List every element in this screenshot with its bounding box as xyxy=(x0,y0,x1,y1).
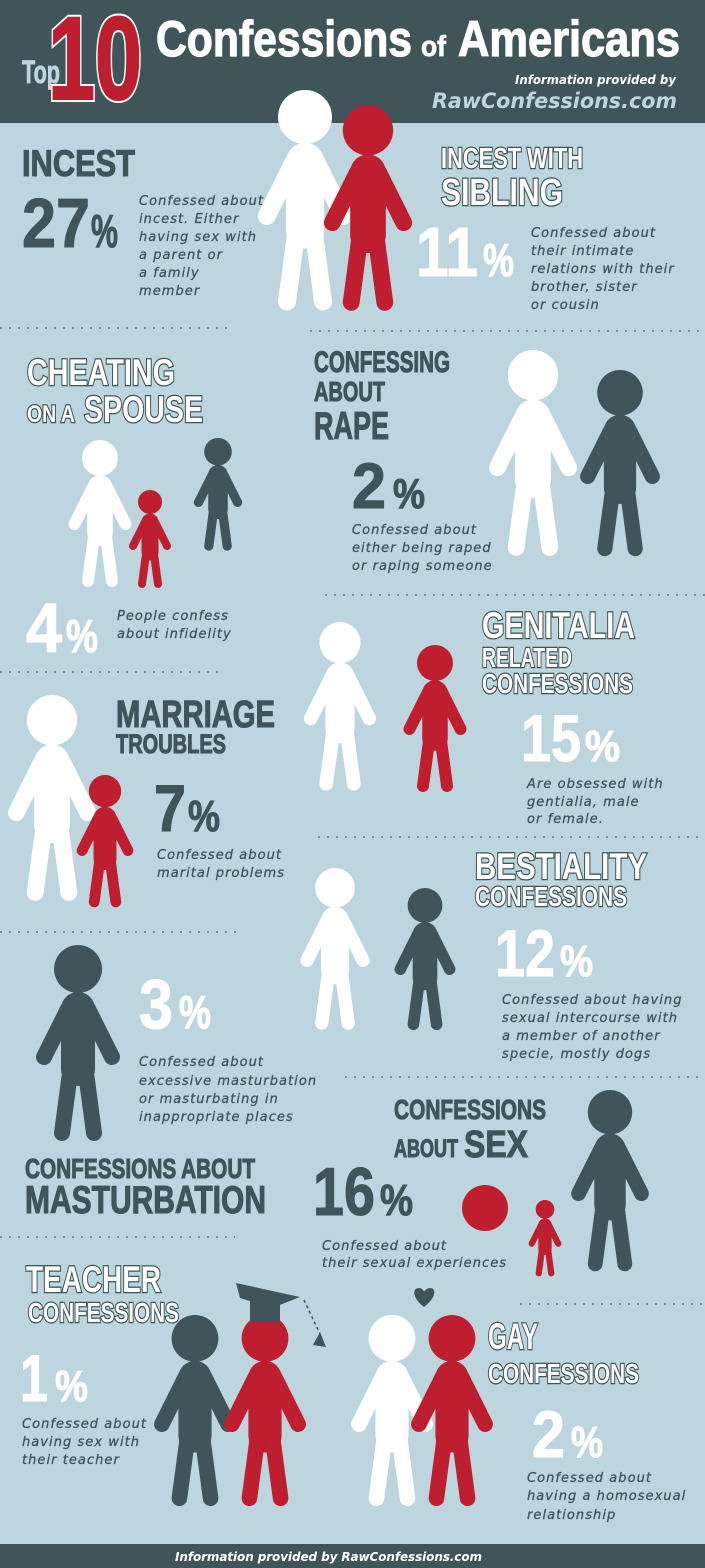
text: bestiality description: a member of another xyxy=(502,1029,661,1044)
stat: 2 percent: % xyxy=(571,1418,603,1467)
text: gay description: Confessed about xyxy=(527,1471,652,1486)
text: incest description xyxy=(139,194,264,299)
icon: neutral figures, gay xyxy=(359,1315,485,1498)
panel: bestiality xyxy=(307,846,683,1062)
title: Top xyxy=(22,54,60,90)
header banner xyxy=(0,0,705,125)
heading: genitalia: RELATED xyxy=(482,642,572,673)
heading: bestiality xyxy=(475,846,647,912)
text: incest description: member xyxy=(139,284,201,299)
text: bestiality description: sexual intercourse with xyxy=(502,1011,678,1026)
text: incest description: a family xyxy=(139,266,200,281)
footer: Information provided by RawConfessions.com xyxy=(175,1550,482,1564)
text: sibling description: Confessed about xyxy=(531,226,656,241)
text: sibling description: relations with their xyxy=(531,262,675,277)
heading: marriage: MARRIAGE xyxy=(116,694,275,736)
text: masturbation description: excessive masturbation xyxy=(139,1074,317,1089)
heading: marriage: TROUBLES xyxy=(116,729,226,759)
text: incest description: a parent or xyxy=(139,248,224,263)
heading: gay xyxy=(488,1316,639,1389)
text: masturbation description: Confessed about xyxy=(139,1055,264,1070)
stat: 4 percent xyxy=(26,589,98,667)
icon: neutral figures, genitalia xyxy=(311,622,460,786)
stat: 3 percent xyxy=(139,965,211,1043)
panel: rape xyxy=(314,346,652,574)
source credit xyxy=(432,73,677,113)
heading: incest with sibling xyxy=(441,143,583,214)
stat: 2 percent xyxy=(532,1397,603,1471)
stat: 16 percent: 16 xyxy=(313,1154,375,1230)
stat: 3 percent: % xyxy=(179,986,211,1038)
heading: teacher: TEACHER xyxy=(26,1259,161,1300)
text: cheating description xyxy=(117,609,232,642)
stat: 27 percent: 27 xyxy=(22,184,90,262)
heading: masturbation: CONFESSIONS ABOUT xyxy=(25,1153,255,1184)
heading: bestiality: CONFESSIONS xyxy=(475,881,627,912)
heading: marriage xyxy=(116,694,275,759)
stat: 7 percent: % xyxy=(188,792,220,841)
heading: sex: ABOUT xyxy=(394,1135,458,1163)
heading: genitalia: GENITALIA xyxy=(482,605,635,646)
heading: gay: GAY xyxy=(488,1316,538,1357)
icon: neutral figures, cheating xyxy=(74,438,238,584)
panel: incest xyxy=(22,143,264,299)
panel: genitalia xyxy=(311,605,664,827)
text: genitalia description: gentialia, male xyxy=(527,795,640,810)
heading: sex xyxy=(394,1094,546,1166)
stat: 2 percent: % xyxy=(393,470,425,517)
heading: rape: CONFESSING xyxy=(314,346,450,379)
title: of xyxy=(421,31,446,63)
panel: gay xyxy=(359,1288,686,1523)
heading: gay: CONFESSIONS xyxy=(488,1358,639,1389)
heading: rape: RAPE xyxy=(314,405,389,448)
text: gay description: relationship xyxy=(527,1508,616,1523)
text: rape description: either being raped xyxy=(352,541,492,556)
text: rape description: Confessed about xyxy=(352,523,477,538)
footer xyxy=(0,1544,705,1568)
icon: heart xyxy=(414,1288,434,1307)
heading: cheating: CHEATING xyxy=(27,352,175,393)
heading: rape xyxy=(314,346,450,448)
stat: 1 percent: 1 xyxy=(20,1341,48,1415)
text: sibling description: their intimate xyxy=(531,244,634,259)
text: sex description xyxy=(322,1239,507,1271)
heading: bestiality: BESTIALITY xyxy=(475,846,647,887)
heading: cheating: ON A xyxy=(27,401,75,428)
heading: teacher xyxy=(26,1259,179,1328)
text: rape description: or raping someone xyxy=(352,559,493,574)
text: incest description: Confessed about xyxy=(139,194,264,209)
text: bestiality description: specie, mostly dogs xyxy=(502,1047,651,1062)
panel: sex xyxy=(313,1090,641,1273)
text: sibling description: or cousin xyxy=(531,298,600,313)
text: gay description: having a homosexual xyxy=(527,1489,686,1504)
title xyxy=(22,0,680,125)
stat: 2 percent xyxy=(352,450,425,522)
stat: 7 percent xyxy=(154,771,220,845)
heading: sex: CONFESSIONS xyxy=(394,1094,546,1125)
text: bestiality description: Confessed about having xyxy=(502,993,683,1008)
stat: 4 percent: 4 xyxy=(26,589,62,667)
stat: 1 percent: % xyxy=(55,1362,88,1411)
icon: neutral figures, top centre xyxy=(267,90,404,302)
text: teacher description: having sex with xyxy=(22,1435,140,1450)
stat: 2 percent: 2 xyxy=(352,450,386,522)
text: bestiality description xyxy=(502,993,683,1062)
text: cheating description: People confess xyxy=(117,609,229,624)
text: genitalia description xyxy=(526,777,664,827)
text: marriage description xyxy=(157,848,285,881)
stat: 4 percent: % xyxy=(66,610,98,662)
stat: 11 percent: 11 xyxy=(416,213,478,291)
text: genitalia description: Are obsessed with xyxy=(526,777,664,792)
text: rape description xyxy=(352,523,493,574)
panel: teacher xyxy=(20,1259,326,1498)
source credit: RawConfessions.com xyxy=(432,89,677,113)
heading: incest: INCEST xyxy=(22,143,135,184)
stat: 12 percent: % xyxy=(560,937,593,986)
stat: 2 percent: 2 xyxy=(532,1397,565,1471)
text: masturbation description: inappropriate places xyxy=(139,1110,294,1125)
panel: masturbation xyxy=(25,945,317,1222)
stat: 3 percent: 3 xyxy=(139,965,173,1043)
stat: 7 percent: 7 xyxy=(154,771,186,845)
panel: incest with sibling xyxy=(416,143,675,313)
heading: sex: SEX xyxy=(464,1124,529,1166)
icon: neutral figures with graduation cap xyxy=(162,1283,326,1498)
text: genitalia description: or female. xyxy=(527,812,604,827)
heading: genitalia: CONFESSIONS xyxy=(482,668,633,699)
panel: marriage troubles xyxy=(16,694,285,902)
source credit: Information provided by xyxy=(515,73,677,87)
panel: cheating on a spouse xyxy=(26,352,238,667)
heading: masturbation: MASTURBATION xyxy=(25,1179,266,1222)
icon: neutral figures, rape xyxy=(497,350,652,549)
heading: cheating: SPOUSE xyxy=(84,389,203,430)
heading: cheating xyxy=(27,352,203,430)
text: teacher description: their teacher xyxy=(22,1453,120,1468)
stat: 27 percent: % xyxy=(91,205,118,257)
heading: rape: ABOUT xyxy=(314,376,385,407)
text: marriage description: Confessed about xyxy=(157,848,282,863)
text: marriage description: marital problems xyxy=(157,866,285,881)
text: sibling description xyxy=(531,226,675,313)
text: cheating description: about infidelity xyxy=(117,627,232,642)
text: teacher description xyxy=(22,1417,147,1468)
text: sex description: Confessed about xyxy=(322,1239,447,1254)
icon: neutral figures, marriage xyxy=(16,695,128,902)
text: teacher description: Confessed about xyxy=(22,1417,147,1432)
stat: 1 percent xyxy=(20,1341,88,1415)
icon: neutral figures, bestiality xyxy=(307,868,450,1024)
text: masturbation description xyxy=(139,1055,317,1125)
stat: 16 percent: % xyxy=(380,1176,413,1225)
stat: 15 percent: 15 xyxy=(521,701,581,775)
heading: genitalia xyxy=(482,605,635,699)
text: gay description xyxy=(527,1471,686,1523)
icon: neutral figures, sex xyxy=(462,1090,641,1273)
text: incest description: incest. Either xyxy=(139,212,240,227)
heading: incest with sibling: INCEST WITH xyxy=(441,143,583,175)
icon: neutral figure, masturbation xyxy=(44,945,112,1133)
heading: teacher: CONFESSIONS xyxy=(28,1297,179,1328)
stat: 15 percent: % xyxy=(585,722,620,771)
text: sex description: their sexual experiences xyxy=(322,1256,507,1271)
heading: masturbation xyxy=(25,1153,266,1222)
heading: incest with sibling: SIBLING xyxy=(441,172,563,214)
text: sibling description: brother, sister xyxy=(531,280,638,295)
text: masturbation description: or masturbating in xyxy=(139,1092,279,1107)
stat: 11 percent: % xyxy=(483,234,514,286)
text: incest description: having sex with xyxy=(139,230,257,245)
stat: 12 percent: 12 xyxy=(495,916,555,990)
title: Confessions xyxy=(156,11,412,67)
